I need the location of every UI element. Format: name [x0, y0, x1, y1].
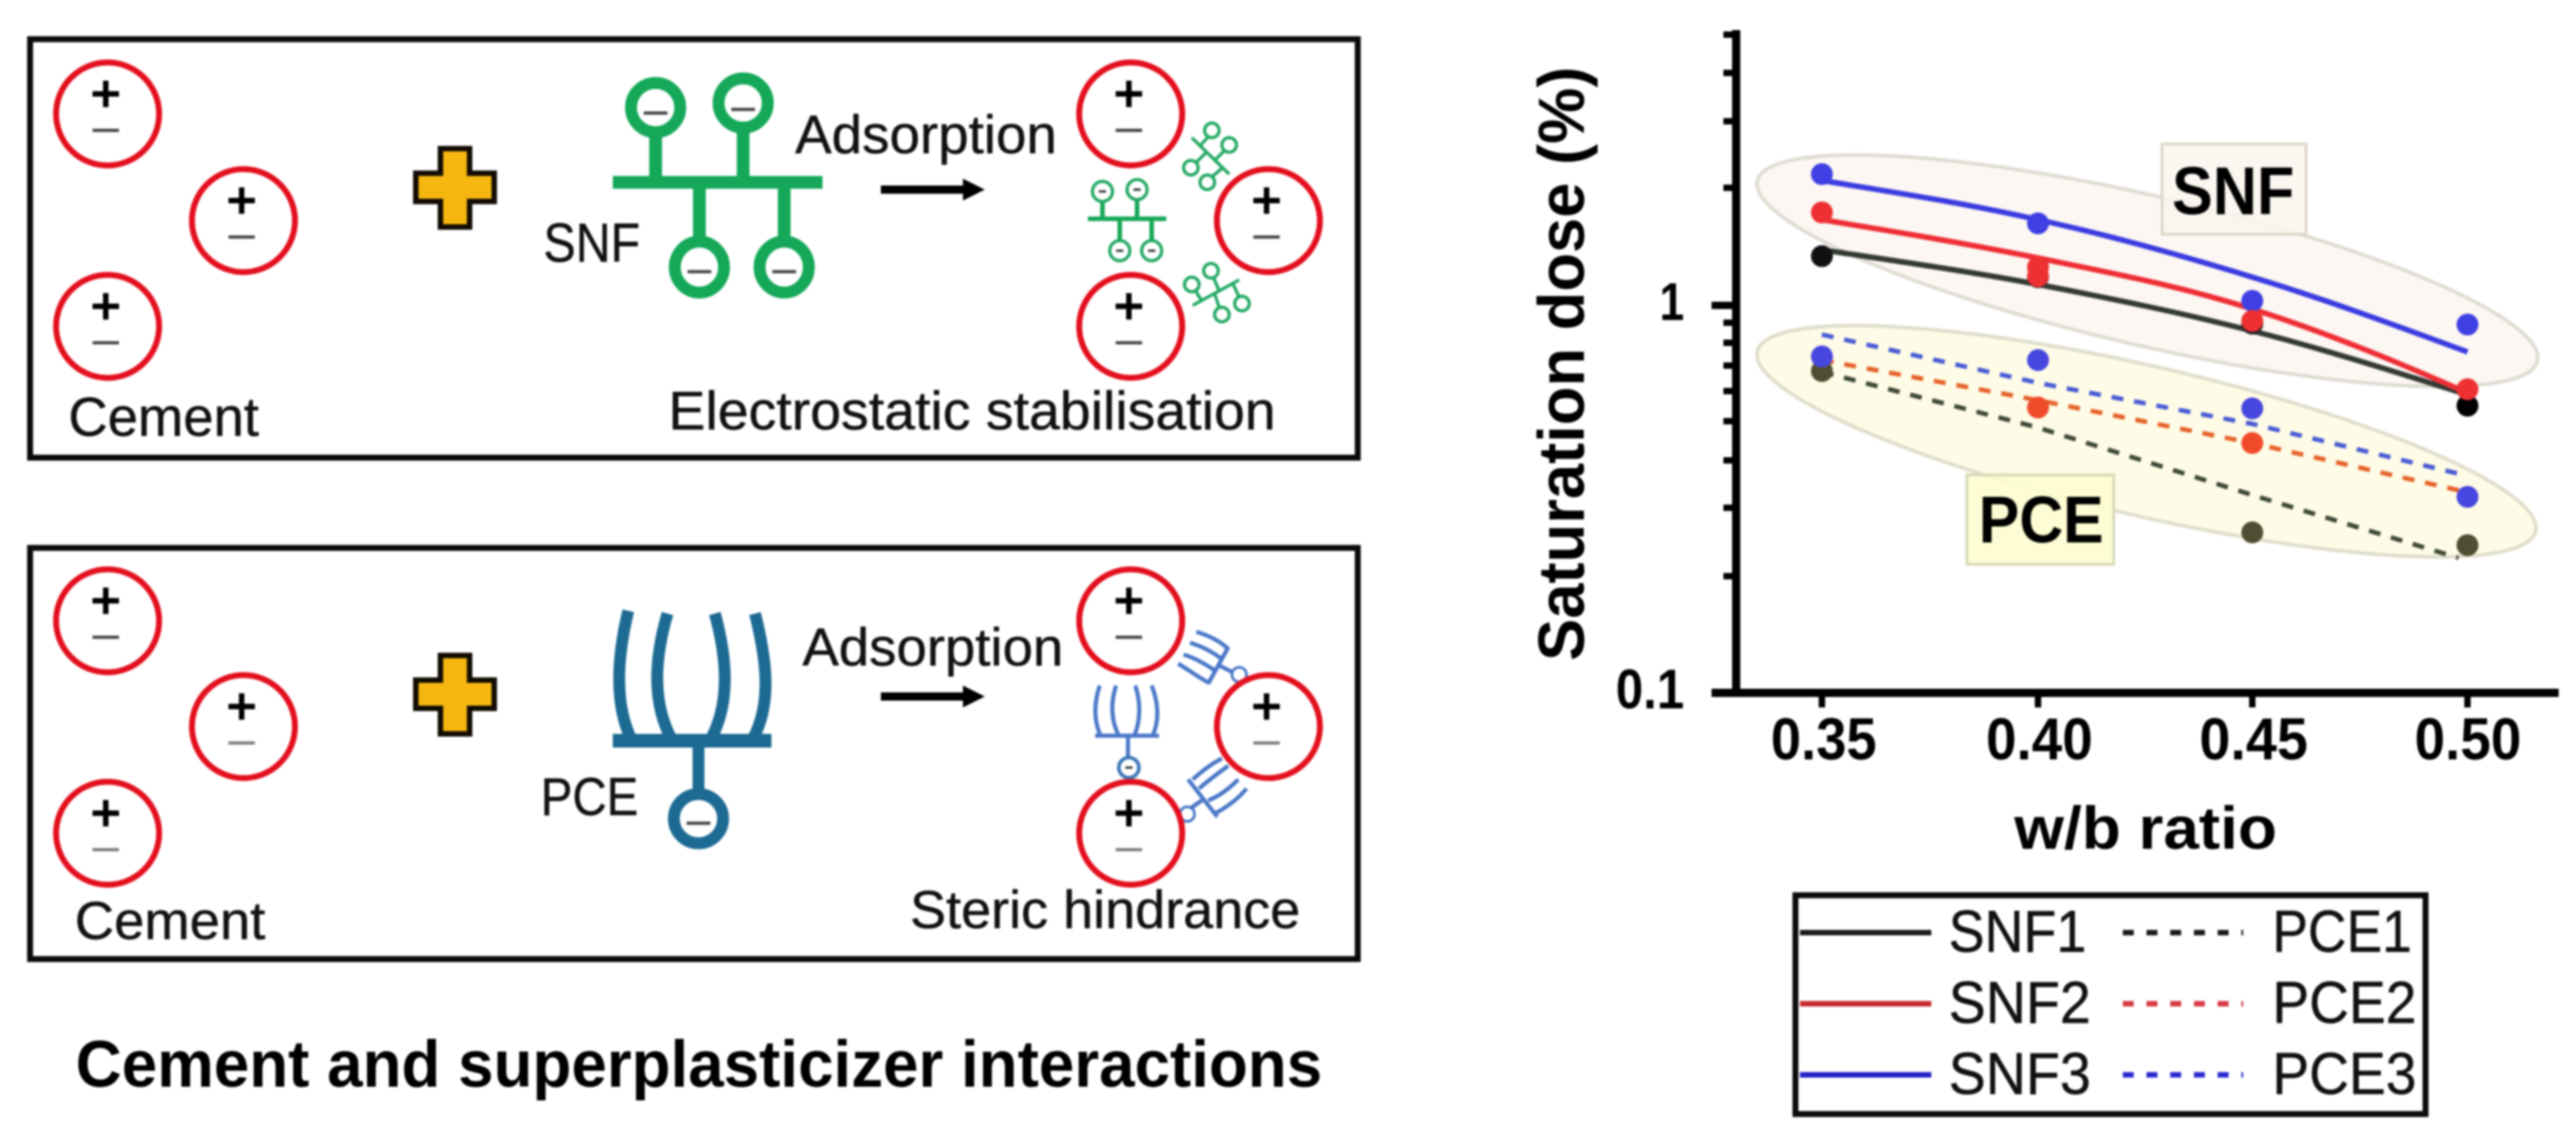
legend labels: SNF2 [1949, 969, 2091, 1036]
label: Steric hindrance: Steric hindrance [910, 881, 1300, 940]
icon: adsorbed SNF upper right [1184, 123, 1236, 190]
panel frame bottom [30, 548, 1358, 959]
y tick label 0.1: 0.1 [1616, 658, 1684, 720]
region: SNF ellipse [1741, 108, 2554, 434]
icon: plus [416, 655, 494, 734]
line chart: saturation dose vs w/b ratio [1526, 30, 2559, 862]
y axis title: Saturation dose (%) [1526, 67, 1598, 661]
panel: SNF electrostatic stabilisation [30, 39, 1358, 458]
label: SNF: SNF [543, 212, 640, 273]
PCE data points [1811, 346, 2478, 556]
label: PCE: PCE [541, 768, 638, 827]
legend labels: PCE3 [2272, 1040, 2416, 1107]
icon: SNF molecule [613, 78, 822, 293]
cement particles right bottom [1080, 569, 1320, 884]
label: Electrostatic stabilisation: Electrostatic stabilisation [668, 381, 1276, 441]
legend keys solid [1800, 933, 1931, 1075]
legend keys dashed [2123, 933, 2243, 1075]
icon: PCE molecule [613, 611, 771, 843]
y tick label 1: 1 [1660, 273, 1684, 332]
x tick labels: 0.35 [1771, 706, 1877, 772]
cement particles left bottom [57, 569, 295, 884]
SNF solid series [1822, 181, 2467, 395]
label: Cement: Cement [75, 892, 265, 951]
panel frame top [30, 39, 1358, 458]
legend frame [1795, 895, 2426, 1114]
label: Adsorption: Adsorption [802, 618, 1063, 677]
legend labels: SNF1 [1949, 898, 2086, 965]
x axis [1712, 693, 2559, 707]
legend [1795, 895, 2426, 1114]
title: Cement and superplasticizer interactions [76, 1028, 1322, 1101]
legend labels: SNF3 [1949, 1040, 2091, 1107]
label: Adsorption: Adsorption [795, 105, 1057, 165]
icon: adsorbed PCE centre [1095, 686, 1159, 778]
icon: adsorbed PCE lower right [1180, 758, 1247, 821]
x tick labels: 0.45 [2199, 706, 2308, 772]
y axis [1712, 30, 1736, 696]
cement particles right top [1080, 62, 1320, 377]
legend labels: PCE1 [2272, 898, 2412, 965]
x tick labels [1771, 706, 2521, 772]
label box: SNF: SNF [2172, 153, 2294, 229]
x tick labels: 0.50 [2415, 706, 2521, 772]
arrow [881, 686, 985, 707]
region: PCE ellipse [1741, 279, 2552, 604]
PCE dashed series [1822, 335, 2467, 558]
cement particles left top [57, 62, 295, 377]
label box: PCE: PCE [1979, 484, 2104, 557]
SNF data points [1811, 163, 2478, 417]
x axis title: w/b ratio [2013, 794, 2277, 862]
x tick labels: 0.40 [1986, 706, 2093, 772]
legend labels [1949, 898, 2416, 1107]
legend labels: PCE2 [2272, 969, 2416, 1036]
panel: PCE steric hindrance [30, 548, 1358, 959]
icon: adsorbed SNF centre [1088, 180, 1166, 261]
icon: plus [416, 149, 494, 227]
label: Cement: Cement [68, 387, 259, 448]
icon: adsorbed PCE upper right [1178, 632, 1247, 684]
arrow [881, 179, 985, 201]
icon: adsorbed SNF lower right [1185, 263, 1249, 322]
